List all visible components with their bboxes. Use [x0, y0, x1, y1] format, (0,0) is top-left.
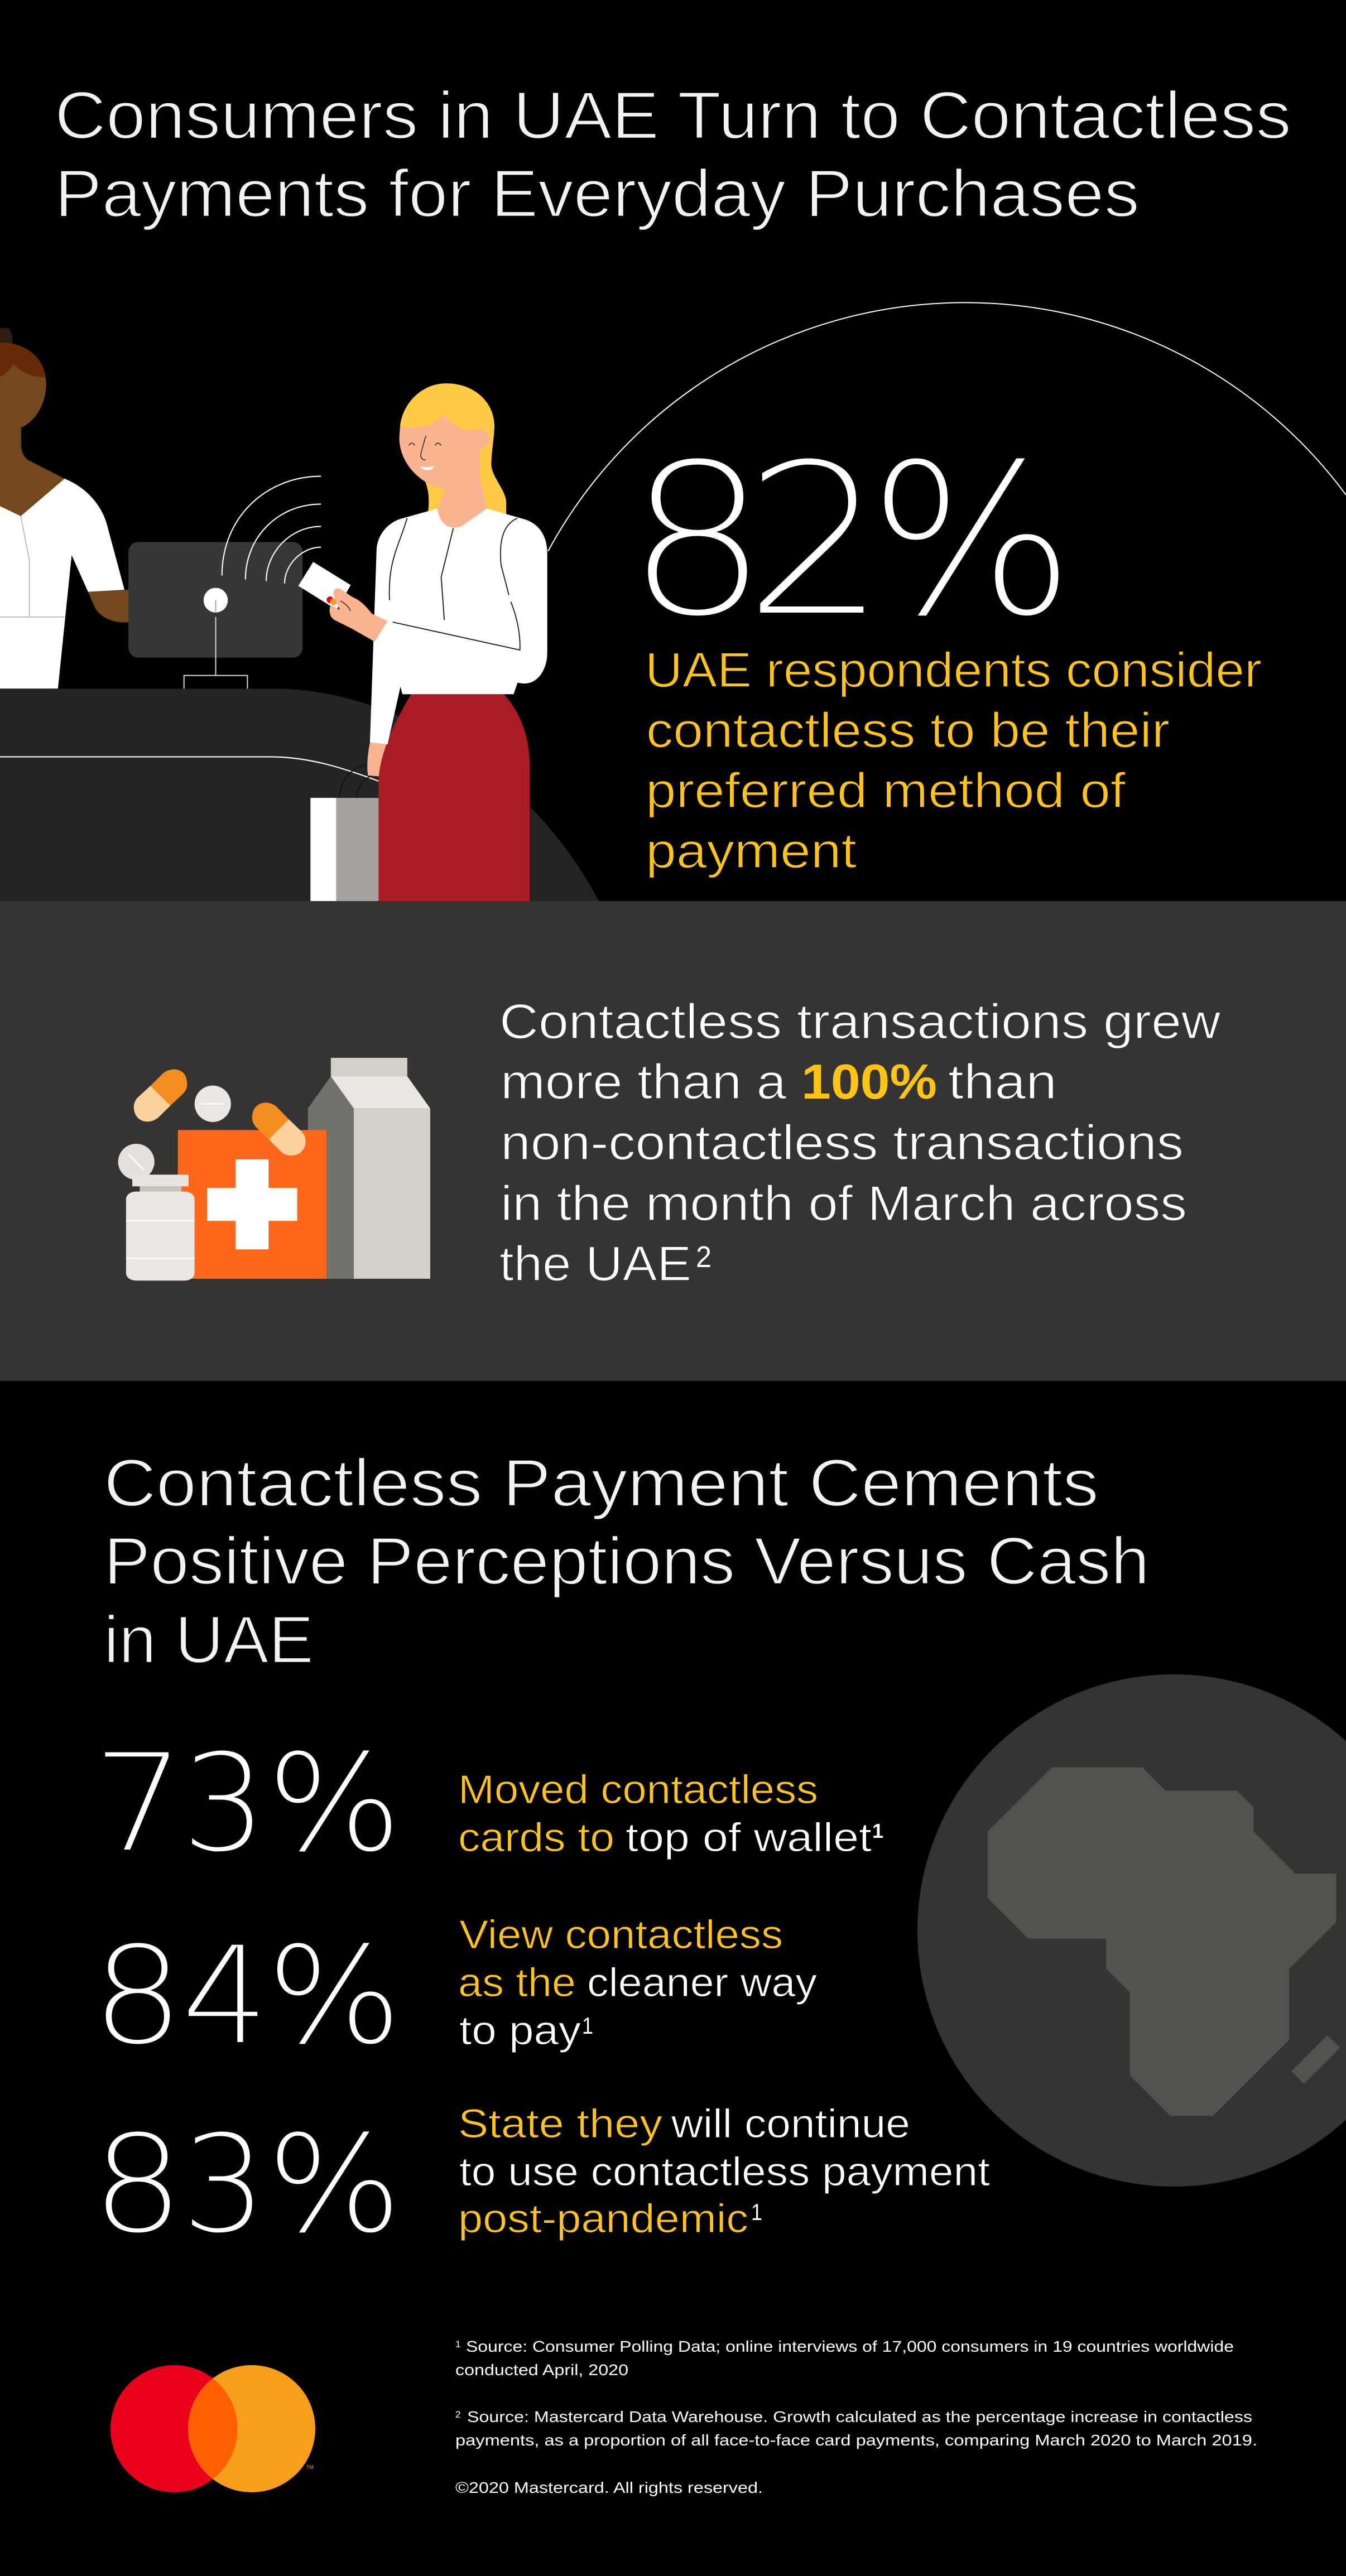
stat text: cleaner way to pay — [458, 1913, 817, 2053]
section heading: Contactless Payment Cements — [104, 1446, 1099, 1520]
panel text: contactless growth: more than a — [501, 1054, 786, 1109]
stat: 73% — [93, 1725, 402, 1882]
icon: Africa map — [988, 1768, 1340, 2116]
headline statistic: 82%: % — [867, 418, 1076, 664]
logo: Mastercard — [110, 2365, 315, 2492]
panel text: contactless growth: non-contactless transactions — [501, 1115, 1184, 1170]
stat text: cleaner way to pay: as the — [458, 1961, 576, 2005]
section heading — [104, 1446, 1150, 1677]
headline statistic: 82%: 2 — [743, 418, 887, 664]
section heading: Positive Perceptions Versus Cash — [104, 1524, 1150, 1598]
stat: 73%: 3 — [181, 1725, 267, 1882]
panel text: contactless growth — [499, 994, 1220, 1291]
stat: 84%: 4 — [181, 1918, 269, 2075]
headline statistic: 82% — [626, 418, 1076, 664]
headline statistic caption — [645, 642, 1262, 878]
stat: 84%: % — [266, 1918, 402, 2075]
stat text: continue post-pandemic: post-pandemic — [458, 2197, 748, 2241]
stat text: continue post-pandemic: will continue — [671, 2102, 910, 2146]
headline statistic caption: contactless to be their — [646, 702, 1170, 758]
stat text: cleaner way to pay: 1 — [582, 2012, 593, 2039]
footnotes: conducted April, 2020 — [455, 2361, 628, 2378]
illustration: checkout scene — [0, 328, 599, 902]
headline statistic caption: preferred method of — [646, 763, 1126, 818]
panel: contactless growth band — [0, 901, 1346, 1381]
footnotes: ©2020 Mastercard. All rights reserved. — [455, 2479, 763, 2496]
stat: 83%: 3 — [181, 2106, 267, 2264]
stat: 83%: % — [266, 2106, 402, 2264]
stat: 84%: 8 — [92, 1918, 184, 2075]
headline statistic caption: UAE respondents consider — [645, 642, 1262, 697]
icon: tilted tablet — [118, 1144, 155, 1180]
title — [55, 78, 1291, 231]
stat: 73%: 7 — [93, 1725, 185, 1882]
icon: medicine and groceries — [118, 1058, 430, 1280]
icon: orange medical box — [178, 1130, 326, 1279]
icon: round tablet — [195, 1086, 231, 1122]
stat text: continue post-pandemic: State they — [458, 2102, 662, 2146]
contactless card — [299, 562, 351, 610]
footnotes: payments, as a proportion of all face-to-face card payments, comparing March 2020 to March 2019. — [455, 2431, 1257, 2449]
headline statistic: 82%: 8 — [626, 418, 770, 664]
icon: milk carton — [308, 1058, 430, 1279]
stat text: continue post-pandemic: 1 — [751, 2199, 762, 2225]
title: Consumers in UAE Turn to Contactless — [55, 78, 1291, 153]
highlight: 100%: 100% — [801, 1054, 937, 1109]
stat text: top of wallet — [458, 1768, 883, 1860]
shopping bag — [310, 764, 379, 902]
icon: pill bottle — [126, 1174, 195, 1280]
stat text: continue post-pandemic — [458, 2102, 990, 2241]
stat: 83% — [92, 2106, 402, 2264]
stat text: top of wallet: top of wallet — [626, 1816, 872, 1860]
title: Payments for Everyday Purchases — [55, 156, 1140, 231]
stat text: cleaner way to pay: cleaner way — [587, 1961, 817, 2005]
stat text: cleaner way to pay: to pay — [459, 2009, 581, 2053]
footnotes: 2 — [455, 2409, 460, 2420]
stat text: continue post-pandemic: to use contactless payment — [459, 2150, 990, 2194]
panel text: contactless growth: the UAE — [499, 1236, 691, 1291]
customer figure — [299, 383, 547, 901]
stat: 83%: 8 — [92, 2106, 184, 2264]
headline statistic caption: payment — [646, 823, 857, 878]
stat: 73%: % — [266, 1725, 402, 1882]
logo: Mastercard: TM — [306, 2464, 314, 2470]
footnotes: Source: Mastercard Data Warehouse. Growth calculated as the percentage increase in contactless — [467, 2408, 1252, 2425]
stat text: top of wallet: cards to — [458, 1816, 614, 1860]
section heading: in UAE — [104, 1602, 314, 1677]
decorative arc around the headline statistic — [548, 302, 1346, 551]
stat text: top of wallet: 1 — [872, 1819, 883, 1842]
icon: capsule upper — [134, 1070, 187, 1121]
footnotes — [455, 2338, 1257, 2496]
contactless wave icon — [222, 476, 321, 584]
cashier figure — [0, 328, 129, 688]
checkout counter — [0, 688, 599, 901]
footnotes: 1 — [455, 2339, 460, 2349]
globe illustration — [917, 1674, 1346, 2187]
panel text: contactless growth: Contactless transactions grew — [499, 994, 1220, 1049]
stat text: top of wallet: Moved contactless — [458, 1768, 818, 1812]
panel text: contactless growth: in the month of March across — [501, 1176, 1187, 1231]
stat: 84% — [92, 1918, 402, 2075]
icon: capsule lower — [252, 1102, 306, 1155]
stat text: cleaner way to pay: View contactless — [459, 1913, 783, 1957]
footnotes: Source: Consumer Polling Data; online interviews of 17,000 consumers in 19 countries worldwide — [466, 2338, 1234, 2355]
panel text: contactless growth: 2 — [696, 1240, 712, 1274]
panel text: contactless growth: than — [948, 1054, 1057, 1109]
payment terminal — [128, 542, 302, 690]
